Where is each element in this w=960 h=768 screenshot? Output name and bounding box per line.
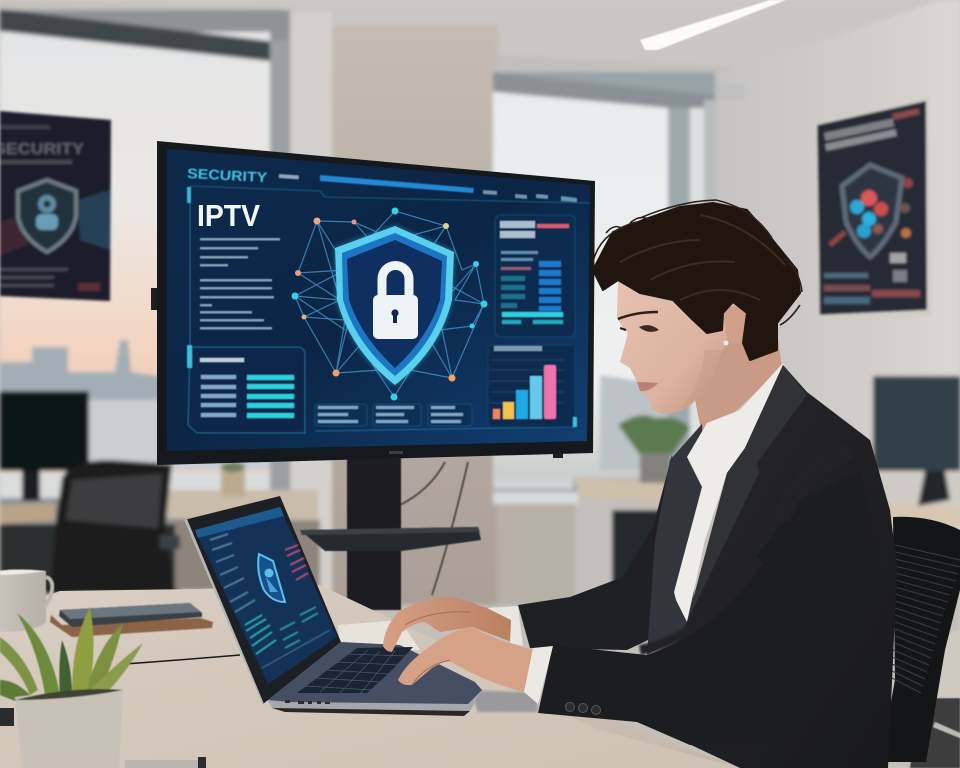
jacket far lapel — [647, 424, 705, 655]
ear — [723, 306, 748, 346]
network lines — [295, 211, 484, 397]
person — [383, 200, 897, 768]
jacket torso — [640, 365, 897, 768]
cable — [125, 655, 240, 664]
left wall poster — [0, 111, 111, 301]
monitor stand and shelf — [300, 458, 481, 610]
right office chair — [880, 517, 960, 762]
plant leaves — [0, 607, 143, 705]
poster shield — [18, 180, 76, 252]
monitor screen — [167, 149, 590, 451]
right side floor and wall behind chair — [910, 630, 960, 768]
neck — [695, 330, 782, 440]
ceiling light — [640, 0, 786, 50]
face — [617, 265, 745, 414]
far arm sleeve — [518, 455, 690, 650]
left background chair — [50, 460, 180, 595]
desk surface — [0, 585, 740, 768]
bar chart — [488, 345, 577, 427]
lips — [637, 382, 658, 391]
laptop ports — [285, 700, 330, 704]
eye and eyebrow — [618, 312, 659, 332]
right window — [493, 72, 716, 492]
jacket buttons — [566, 702, 600, 714]
table reflection — [470, 690, 538, 712]
laptop screen lines — [210, 534, 330, 668]
network nodes — [292, 208, 488, 400]
padlock — [373, 266, 418, 339]
central shield — [335, 226, 454, 385]
jacket lapel — [687, 365, 807, 622]
right wall poster — [814, 96, 932, 322]
paper sheet — [338, 620, 420, 650]
tablet and notebook — [50, 603, 213, 637]
dashboard header: SECURITY — [187, 165, 268, 185]
near arm sleeve — [538, 470, 880, 745]
laptop shield — [258, 554, 285, 602]
large monitor — [151, 141, 595, 465]
poster heading — [824, 108, 920, 151]
upper hand — [383, 597, 512, 652]
left background desk — [0, 462, 320, 594]
near shirt cuff — [524, 646, 553, 704]
dashboard header — [187, 165, 590, 346]
object at desk edge — [0, 708, 14, 726]
coffee mug — [0, 570, 52, 632]
right data panel — [495, 215, 575, 337]
desk plant — [0, 607, 143, 768]
right background desk and cabinet — [493, 470, 960, 605]
left background monitor — [0, 391, 89, 501]
poster shield with dots — [830, 165, 913, 257]
plant pot — [15, 690, 123, 768]
laptop screen — [195, 507, 337, 684]
left window — [0, 9, 290, 540]
lower left panel — [187, 345, 305, 433]
monitor bezel — [157, 141, 595, 465]
laptop front edge — [268, 690, 482, 711]
laptop lid — [184, 496, 341, 704]
bottom info cards — [315, 404, 575, 431]
poster stats — [824, 253, 920, 304]
skyline — [0, 340, 270, 470]
IPTV heading: IPTV — [197, 198, 260, 233]
keyboard — [297, 647, 413, 693]
hair — [593, 200, 802, 360]
right background monitor — [873, 376, 960, 506]
cheek shadow — [680, 350, 728, 410]
far shirt cuff — [487, 606, 523, 646]
poster footer lines — [0, 268, 100, 291]
lower hand — [398, 627, 533, 692]
cables — [400, 462, 468, 595]
window plant — [618, 415, 690, 483]
left text lines — [200, 238, 280, 330]
laptop base — [268, 642, 482, 706]
shirt collar — [674, 363, 786, 622]
laptop — [184, 496, 482, 716]
